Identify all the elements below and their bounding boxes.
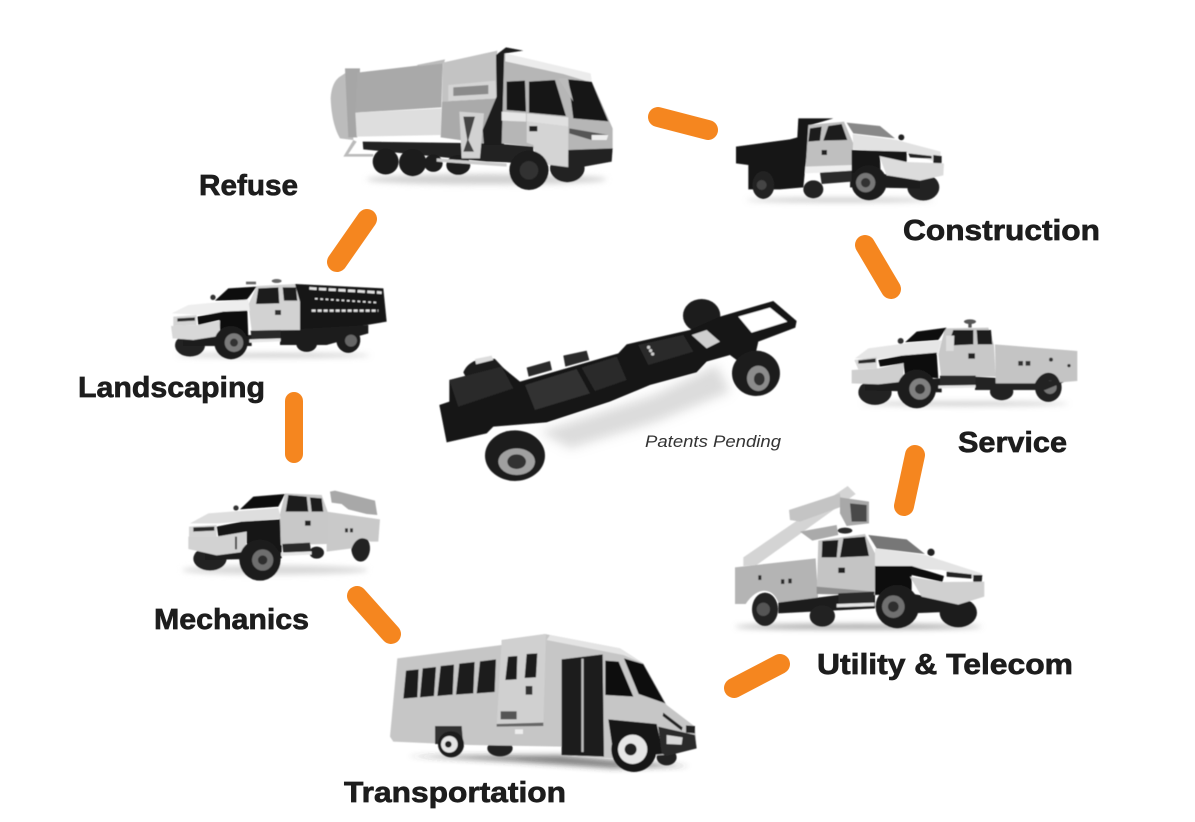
front wheel	[485, 430, 545, 481]
windows	[948, 330, 973, 346]
vehicle: transportation bus	[390, 634, 697, 772]
front wheel	[897, 370, 936, 408]
skirt	[251, 330, 281, 341]
skirt	[838, 592, 874, 605]
rear wheel	[732, 351, 780, 396]
front bumper	[879, 156, 944, 181]
front bumper	[568, 148, 613, 168]
battery side pack	[638, 335, 693, 365]
wheel arch	[217, 519, 281, 552]
chassis	[975, 377, 1065, 390]
battery top panels	[525, 369, 590, 410]
shadow	[862, 402, 1068, 405]
cab	[805, 122, 853, 173]
entry door	[562, 654, 604, 757]
rear wheels	[309, 535, 370, 562]
windshield	[240, 494, 285, 509]
grille	[173, 315, 197, 326]
rear lift door	[497, 634, 546, 726]
chassis and rear wheels	[778, 595, 875, 613]
windshield	[215, 287, 257, 301]
wheel arch	[197, 311, 248, 337]
orange connector: transportation to mechanics	[357, 596, 391, 634]
crane	[330, 491, 377, 515]
refuse chassis	[363, 142, 533, 163]
body panels	[355, 63, 443, 113]
front wheel	[509, 151, 549, 190]
label: Landscaping: Landscaping	[78, 372, 265, 404]
label: Refuse: Refuse	[199, 170, 298, 202]
shadow	[182, 565, 368, 575]
rear top wheel	[683, 299, 720, 332]
label: Utility and Telecom: Utility & Telecom	[817, 649, 1073, 681]
wheel arch	[875, 566, 944, 595]
stake bed	[295, 284, 387, 333]
truck: service	[852, 319, 1077, 408]
cab windows	[507, 81, 526, 112]
turntable	[800, 525, 838, 541]
cab	[279, 493, 328, 545]
label: Service: Service	[958, 427, 1067, 459]
far front wheel and underbody	[858, 380, 892, 405]
front arch and bumper	[608, 719, 663, 757]
front wheel	[611, 727, 657, 772]
wheel arch	[878, 353, 938, 378]
truck: utility and telecom	[735, 486, 984, 629]
shadow	[367, 174, 607, 185]
windows	[286, 495, 308, 512]
stake bed gaps	[309, 288, 382, 311]
windows	[822, 540, 838, 557]
chassis silhouette	[439, 301, 797, 442]
skirt	[282, 543, 311, 554]
front wheel	[851, 165, 887, 200]
windows	[808, 127, 822, 142]
rear wheels	[296, 327, 360, 353]
front far wheel	[463, 358, 510, 385]
hood	[875, 548, 982, 581]
rear wheels	[990, 373, 1062, 402]
hood	[172, 299, 250, 315]
bumper	[852, 363, 904, 384]
black cab gap	[483, 47, 523, 145]
central chassis	[439, 299, 797, 481]
truck: landscaping	[171, 279, 387, 359]
truck: construction	[736, 118, 944, 202]
rear loader hopper	[331, 70, 353, 140]
side arm	[459, 112, 484, 158]
cab	[502, 53, 613, 167]
bus body	[390, 634, 697, 758]
skirt	[940, 376, 976, 387]
caption: patents pending: Patents Pending	[645, 432, 782, 451]
far front wheel and underbody	[907, 174, 939, 201]
windshield	[847, 123, 895, 138]
orange connector: refuse to construction	[658, 117, 708, 130]
hood	[853, 134, 941, 163]
truck: refuse	[331, 47, 613, 190]
bumper	[188, 532, 247, 555]
skirt	[820, 171, 852, 184]
bumper	[171, 321, 220, 340]
boom	[743, 486, 856, 566]
orange connector: service to utility	[904, 455, 915, 506]
chassis	[280, 325, 368, 345]
grille	[189, 525, 217, 537]
front pack	[449, 367, 513, 407]
wheel arch	[852, 150, 907, 176]
rear wheels	[373, 149, 470, 176]
shadow	[407, 755, 690, 768]
utility body	[995, 344, 1077, 383]
hood	[190, 508, 281, 523]
truck: mechanics	[182, 491, 380, 581]
service body	[327, 512, 380, 552]
passenger windows	[403, 659, 496, 699]
cab	[248, 284, 300, 331]
far wheel	[487, 740, 513, 756]
ground shadow	[540, 365, 730, 448]
far front wheel	[657, 749, 677, 765]
utility bed	[735, 558, 818, 604]
far front wheel	[550, 154, 585, 182]
cab	[817, 534, 878, 595]
label: Mechanics: Mechanics	[154, 604, 309, 636]
front wheel	[214, 326, 248, 359]
orange connector: construction to service	[865, 245, 891, 289]
orange connector: utility to transportation	[734, 664, 780, 688]
orange connector: landscaping to refuse	[337, 219, 367, 262]
far front wheel and underbody	[940, 598, 977, 627]
label: Construction: Construction	[903, 215, 1100, 247]
bucket	[840, 497, 869, 526]
cab windows	[605, 661, 633, 697]
front wheel	[239, 539, 281, 581]
label: Transportation: Transportation	[344, 777, 566, 809]
far front wheel and underbody	[193, 547, 227, 571]
drive unit	[692, 330, 720, 348]
orange connector: mechanics to landscaping	[285, 401, 303, 454]
windshield	[905, 328, 947, 342]
raised boxes	[527, 361, 552, 377]
rear wheels	[752, 171, 823, 199]
shadow	[735, 625, 982, 629]
rear arch and wheel	[435, 726, 463, 745]
cab	[938, 328, 996, 377]
hood	[855, 340, 942, 359]
front bumper	[910, 577, 984, 605]
shadow	[747, 198, 933, 202]
front wheel	[876, 585, 919, 628]
shadow	[177, 354, 370, 357]
windshield	[868, 535, 925, 554]
grille	[854, 357, 877, 369]
dump bed	[736, 118, 833, 189]
rear frame opening	[738, 308, 787, 333]
far front wheel and underbody	[175, 334, 205, 357]
windows	[256, 287, 279, 304]
